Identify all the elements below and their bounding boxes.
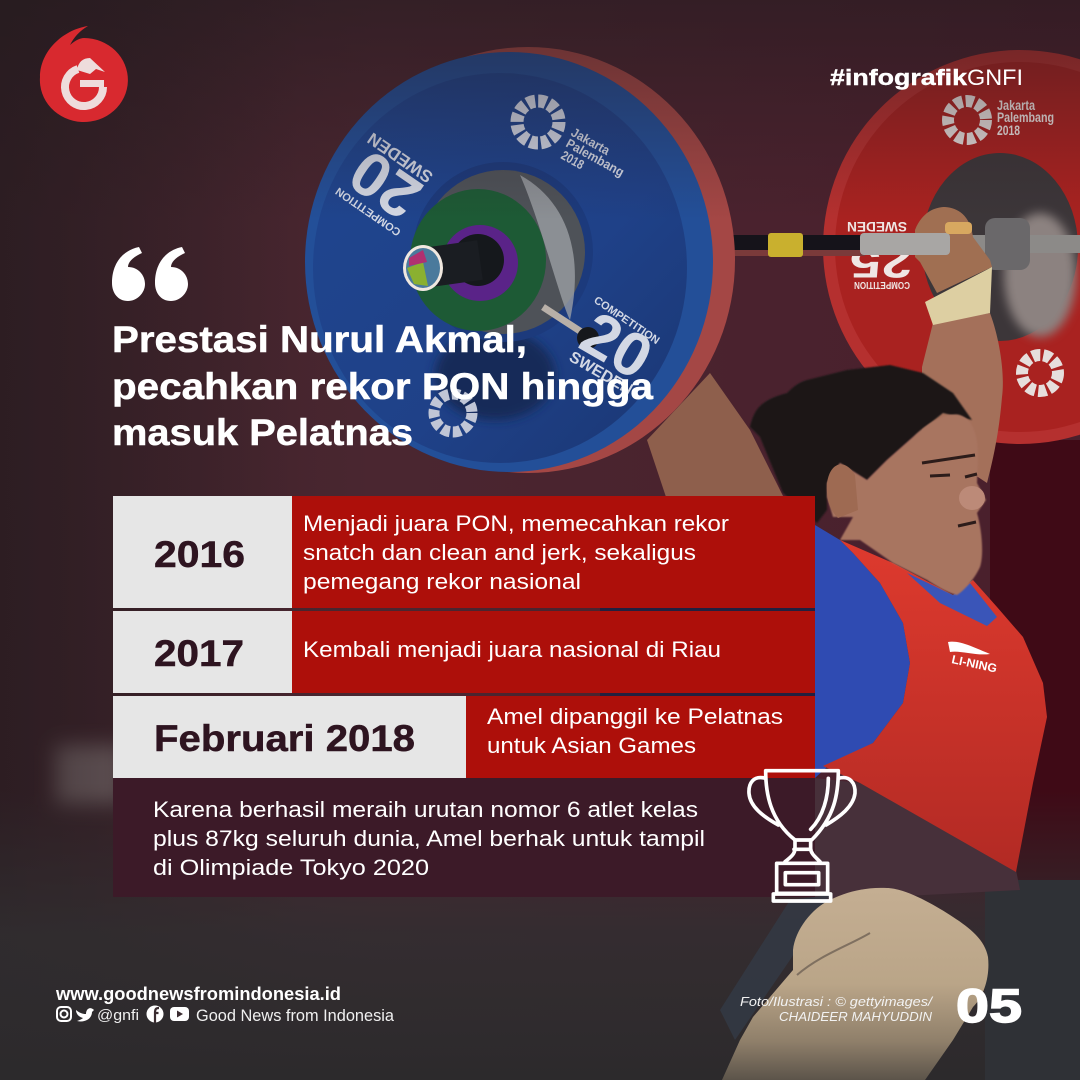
photo: blue weight plate <box>305 47 735 473</box>
page number: 05 <box>956 979 1022 1032</box>
singlet logo text: LI-NING <box>950 652 998 675</box>
left leg <box>720 895 830 1040</box>
green collar <box>410 189 546 331</box>
title: Prestasi Nurul Akmal, <box>112 319 527 360</box>
timeline row: Februari 2018: Februari 2018 <box>154 718 415 759</box>
photo: right red weight plate: Palembang <box>997 109 1054 125</box>
shadow under hub <box>435 330 555 420</box>
timeline row: 2016: 2016 <box>154 534 245 575</box>
title: masuk Pelatnas <box>112 412 413 453</box>
hub <box>413 162 593 342</box>
timeline row: 2016: snatch dan clean and jerk, sekaligus <box>303 540 696 565</box>
blue sleeve <box>815 525 910 778</box>
blue collar <box>907 573 997 626</box>
photo: blue weight plate: COMPETITION <box>334 185 403 238</box>
photo: blue weight plate: 2018 <box>559 148 587 172</box>
hand gripping bar <box>915 207 992 293</box>
photo: blue weight plate: Jakarta <box>569 125 613 158</box>
barbell sleeve <box>452 234 504 286</box>
icon: twitter <box>76 1008 94 1021</box>
panel: Olympic qualification note: di Olimpiade Tokyo 2020 <box>153 855 429 880</box>
wrist bandage <box>925 267 992 325</box>
singlet logo swoosh <box>948 642 990 654</box>
plate markings right: 20 <box>569 299 664 393</box>
photo: athlete <box>720 207 1080 1080</box>
timeline row: 2017 <box>113 611 815 693</box>
nose <box>959 486 985 510</box>
icon: trophy <box>749 771 855 901</box>
icon: instagram <box>57 1007 71 1021</box>
photo: barbell bar <box>730 218 1080 270</box>
emblem eagle head <box>77 58 105 74</box>
photo: blue weight plate: Palembang <box>564 136 627 180</box>
plate emblem bottom <box>434 394 472 432</box>
photo credit: Foto/Ilustrasi : © gettyimages/ <box>740 994 934 1009</box>
footer: website and social handles <box>55 984 395 1025</box>
photo: right red weight plate: 25 <box>850 241 912 285</box>
hair <box>750 365 972 523</box>
face <box>827 414 986 595</box>
barbell end cap <box>403 245 443 291</box>
gold tape <box>945 222 972 234</box>
timeline row: Februari 2018: untuk Asian Games <box>487 733 696 758</box>
footer: website and social handles: Good News from Indonesia <box>196 1006 395 1025</box>
photo: blue weight plate: SWEDEN <box>566 349 635 399</box>
timeline row: Februari 2018 <box>113 696 815 778</box>
icon: youtube <box>170 1007 189 1021</box>
knee support <box>722 888 988 1080</box>
title: pecahkan rekor PON hingga <box>112 366 653 407</box>
collar pin <box>543 307 583 333</box>
photo: right red weight plate: SWEDEN <box>847 219 907 235</box>
photo: right red weight plate: Jakarta <box>997 97 1035 113</box>
purple ring <box>442 225 518 301</box>
photo: right red weight plate: COMPETITION <box>854 279 910 290</box>
panel: Olympic qualification note: plus 87kg seluruh dunia, Amel berhak untuk tampil <box>153 826 705 851</box>
photo: right red weight plate: 2018 <box>997 122 1020 138</box>
photo: blue weight plate: COMPETITION <box>592 294 662 347</box>
plate emblem top <box>517 101 559 143</box>
singlet mesh <box>815 778 1020 900</box>
icon: opening quotation mark <box>112 247 188 301</box>
plate markings left: 20 <box>338 136 434 232</box>
red singlet <box>823 540 1047 872</box>
icon: facebook <box>146 1006 164 1023</box>
panel: Olympic qualification note <box>113 778 815 897</box>
footer: website and social handles: www.goodnewsfromindonesia.id <box>55 984 341 1004</box>
photo: blue weight plate: SWEDEN <box>364 129 436 187</box>
hashtag label: #infografik <box>830 65 968 90</box>
timeline row: 2016: Menjadi juara PON, memecahkan rekor <box>303 511 729 536</box>
panel: Olympic qualification note: Karena berhasil meraih urutan nomor 6 atlet kelas <box>153 797 698 822</box>
photo credit <box>740 994 934 1024</box>
barbell grip section <box>860 233 950 255</box>
emblem G bar <box>80 80 104 87</box>
emblem ring <box>65 69 103 106</box>
plate emblem bottom <box>1022 355 1058 391</box>
knee fold <box>797 933 870 975</box>
logo: GNFI red six with white G emblem <box>40 26 128 122</box>
timeline row: 2016 <box>113 496 815 608</box>
right arm <box>922 313 1003 483</box>
timeline row: 2017: 2017 <box>154 633 244 674</box>
ear <box>827 464 858 518</box>
footer: website and social handles: @gnfi <box>97 1007 139 1024</box>
timeline row: Februari 2018: Amel dipanggil ke Pelatnas <box>487 704 783 729</box>
timeline row: 2017: Kembali menjadi juara nasional di Riau <box>303 637 721 662</box>
photo: left arm <box>647 373 785 500</box>
photo credit: CHAIDEER MAHYUDDIN <box>779 1009 933 1024</box>
title <box>112 319 653 453</box>
photo: right red weight plate <box>823 50 1080 444</box>
timeline row: 2016: pemegang rekor nasional <box>303 569 581 594</box>
hashtag label: GNFI <box>967 65 1023 90</box>
lower right dark leg <box>985 880 1080 1080</box>
plate emblem top <box>948 101 986 139</box>
eyebrow and eye <box>922 455 977 526</box>
